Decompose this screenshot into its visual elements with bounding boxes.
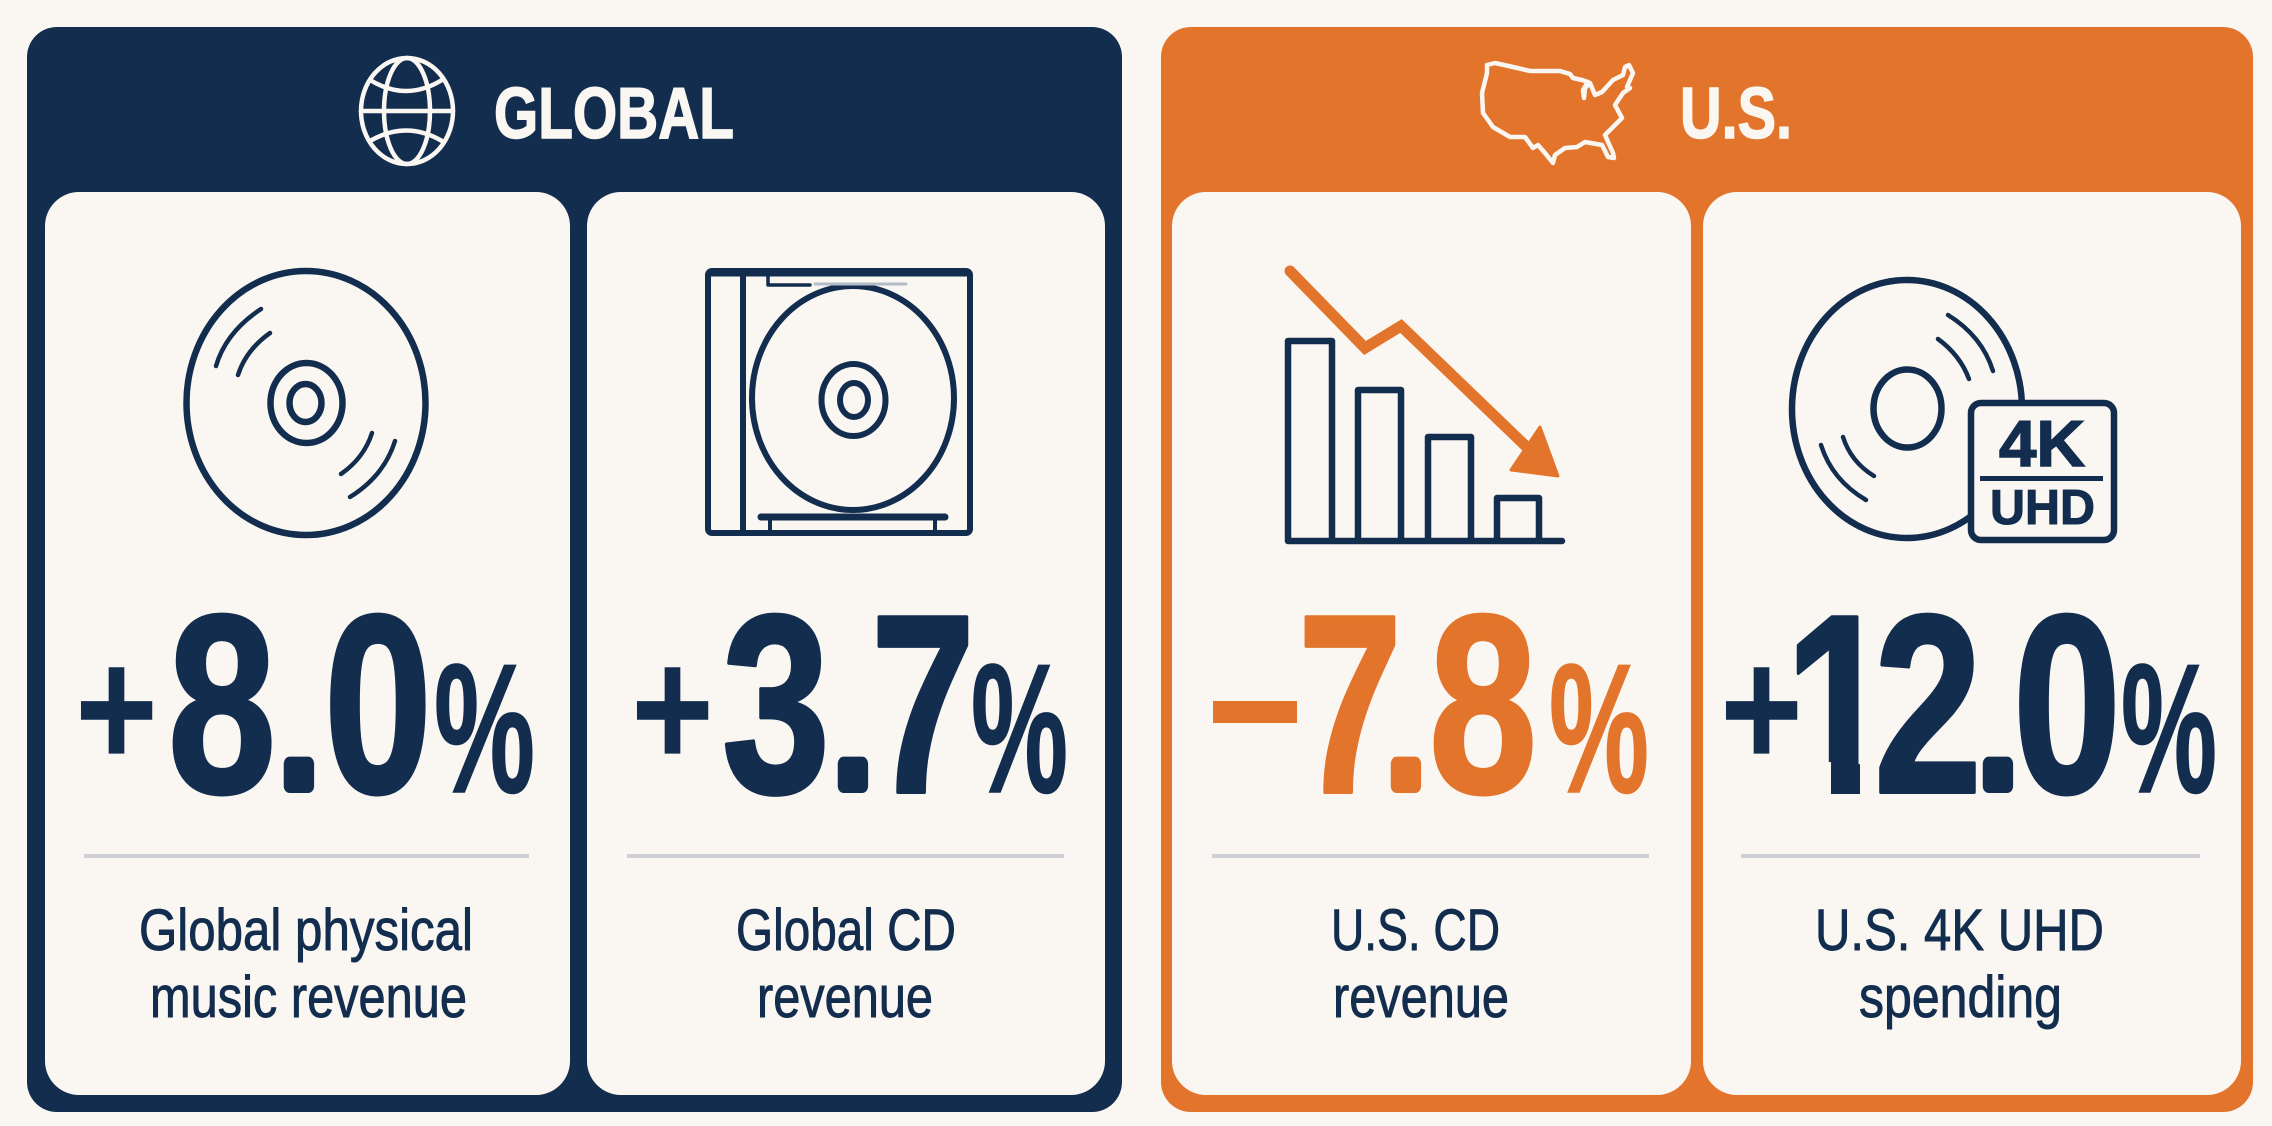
value: +3.7%: . xyxy=(835,650,871,818)
icon: globe xyxy=(361,58,453,164)
icon: disc with 4k uhd badge: UHD xyxy=(1990,481,2095,535)
value: -7.8%: 7 xyxy=(1298,562,1402,846)
icon: cd in jewel case xyxy=(708,271,970,533)
card: global physical music revenue xyxy=(45,192,570,1095)
value: +12.0%: 2 xyxy=(1874,562,1982,846)
value: +3.7%: 7 xyxy=(871,562,975,846)
icon: disc with 4k uhd badge xyxy=(1792,280,2114,540)
value: +8.0%: % xyxy=(434,625,535,831)
value: +3.7%: + xyxy=(631,614,714,804)
label: global physical music revenue: music revenue xyxy=(150,965,467,1030)
icon: declining bar chart xyxy=(1288,271,1562,541)
heading: global xyxy=(361,58,734,164)
value: +3.7%: 3 xyxy=(722,562,830,846)
value: +12.0%: 0 xyxy=(2013,562,2121,846)
value: +3.7% xyxy=(631,562,1068,846)
value: -7.8%: . xyxy=(1388,650,1424,818)
label: u.s. 4k uhd spending: U.S. 4K UHD xyxy=(1815,898,2104,963)
card: u.s. cd revenue xyxy=(1172,192,1691,1095)
label: global cd revenue: Global CD xyxy=(736,898,956,963)
value: -7.8% xyxy=(1213,562,1649,846)
value: +8.0%: 8 xyxy=(168,562,276,846)
label: global cd revenue xyxy=(736,898,956,1030)
card: global cd revenue xyxy=(587,192,1105,1095)
heading: global: GLOBAL xyxy=(494,74,734,154)
label: u.s. 4k uhd spending: spending xyxy=(1859,965,2062,1030)
panel: u.s. xyxy=(1161,27,2253,1112)
value: +3.7%: % xyxy=(971,625,1068,831)
value: -7.8%: 8 xyxy=(1429,562,1537,846)
value: +8.0% xyxy=(75,562,535,846)
panel: global xyxy=(27,27,1122,1112)
card: u.s. 4k uhd spending xyxy=(1703,192,2241,1095)
label: global physical music revenue xyxy=(139,898,473,1030)
value: +8.0%: 0 xyxy=(324,562,432,846)
value: +8.0%: + xyxy=(75,614,158,804)
icon: map of the united states xyxy=(1482,63,1633,163)
label: u.s. cd revenue xyxy=(1331,898,1509,1030)
label: u.s. 4k uhd spending xyxy=(1815,898,2104,1030)
icon: compact disc xyxy=(186,271,426,535)
arrow: downward trend xyxy=(1290,271,1558,476)
label: u.s. cd revenue: revenue xyxy=(1333,965,1509,1030)
label: global physical music revenue: Global physical xyxy=(139,898,473,963)
label: global cd revenue: revenue xyxy=(757,965,933,1030)
icon: disc with 4k uhd badge: 4K xyxy=(1999,407,2085,480)
value: +8.0%: . xyxy=(281,650,317,818)
value: +12.0%: . xyxy=(1980,650,2016,818)
value: +12.0%: + xyxy=(1720,614,1803,804)
value: -7.8%: % xyxy=(1549,625,1649,831)
label: u.s. cd revenue: U.S. CD xyxy=(1331,898,1500,963)
value: +12.0%: 1 xyxy=(1785,562,1893,846)
heading: u.s.: U.S. xyxy=(1680,74,1792,154)
value: +12.0% xyxy=(1720,562,2217,846)
heading: u.s. xyxy=(1482,63,1792,163)
